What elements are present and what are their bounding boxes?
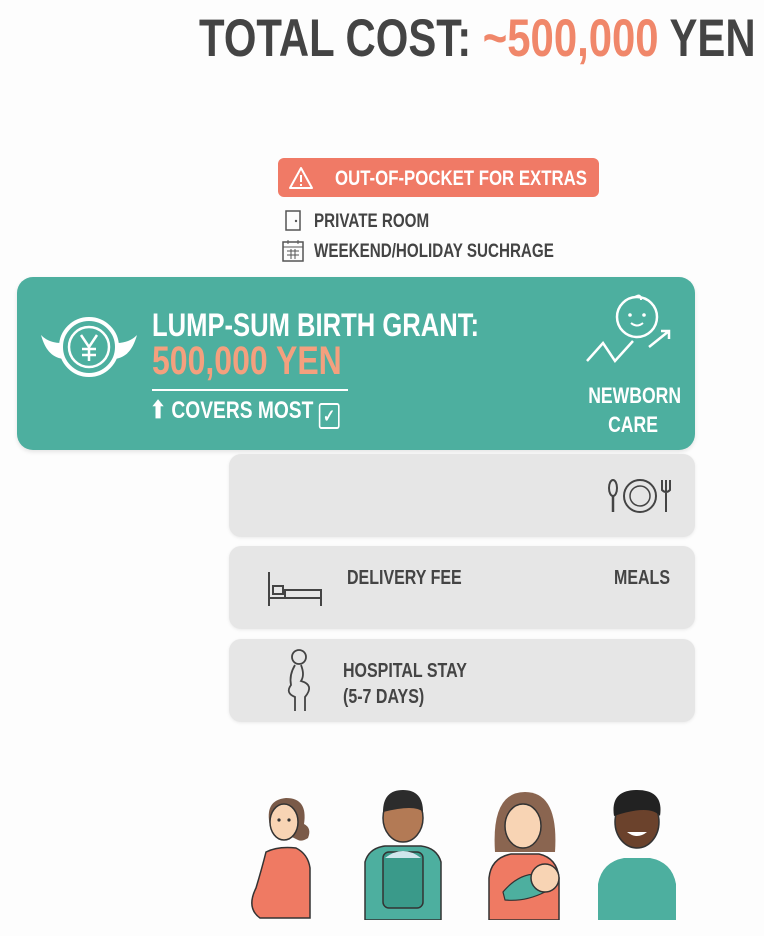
panel: birth grant: 500,000 YEN: [152, 339, 342, 383]
person: man with carrier: [364, 790, 442, 920]
panel: birth grant: [17, 277, 695, 450]
person: mother with baby: [488, 792, 560, 920]
badge: out-of-pocket: OUT-OF-POCKET FOR EXTRAS: [335, 167, 587, 190]
panel: birth grant: CARE: [608, 412, 658, 437]
covers most: ⬆ COVERS MOST: [150, 397, 313, 424]
icon: pregnant woman: [288, 649, 310, 711]
icon: plate and cutlery: [608, 479, 671, 513]
box: delivery fee: [229, 546, 695, 629]
panel: birth grant: LUMP-SUM BIRTH GRANT:: [152, 307, 479, 343]
box: hospital stay: HOSPITAL STAY: [343, 660, 467, 682]
person: smiling man: [598, 790, 676, 920]
list: extras: [282, 210, 554, 262]
icon: yen coin with wings: [41, 317, 137, 377]
box: delivery fee: DELIVERY FEE: [347, 567, 462, 589]
panel: birth grant: NEWBORN: [588, 383, 681, 408]
icon: door: [285, 210, 301, 231]
icon: bed: [268, 572, 322, 606]
icon: warning: [289, 167, 313, 189]
people illustrations: [251, 790, 676, 920]
box: hospital stay: (5-7 DAYS): [343, 686, 424, 708]
icon: calendar: [282, 240, 304, 262]
title: TOTAL COST: ~500,000 YEN: [199, 9, 756, 68]
person: pregnant woman: [251, 798, 311, 919]
covers most: ✓: [323, 406, 335, 426]
list: extras: PRIVATE ROOM: [314, 211, 429, 232]
box: meals icon: [229, 454, 695, 537]
icon: baby growth: [586, 294, 670, 363]
list: extras: WEEKEND/HOLIDAY SUCHRAGE: [314, 241, 554, 262]
box: delivery fee: MEALS: [614, 567, 670, 589]
box: hospital stay: [229, 639, 695, 722]
badge: out-of-pocket: [278, 158, 599, 197]
